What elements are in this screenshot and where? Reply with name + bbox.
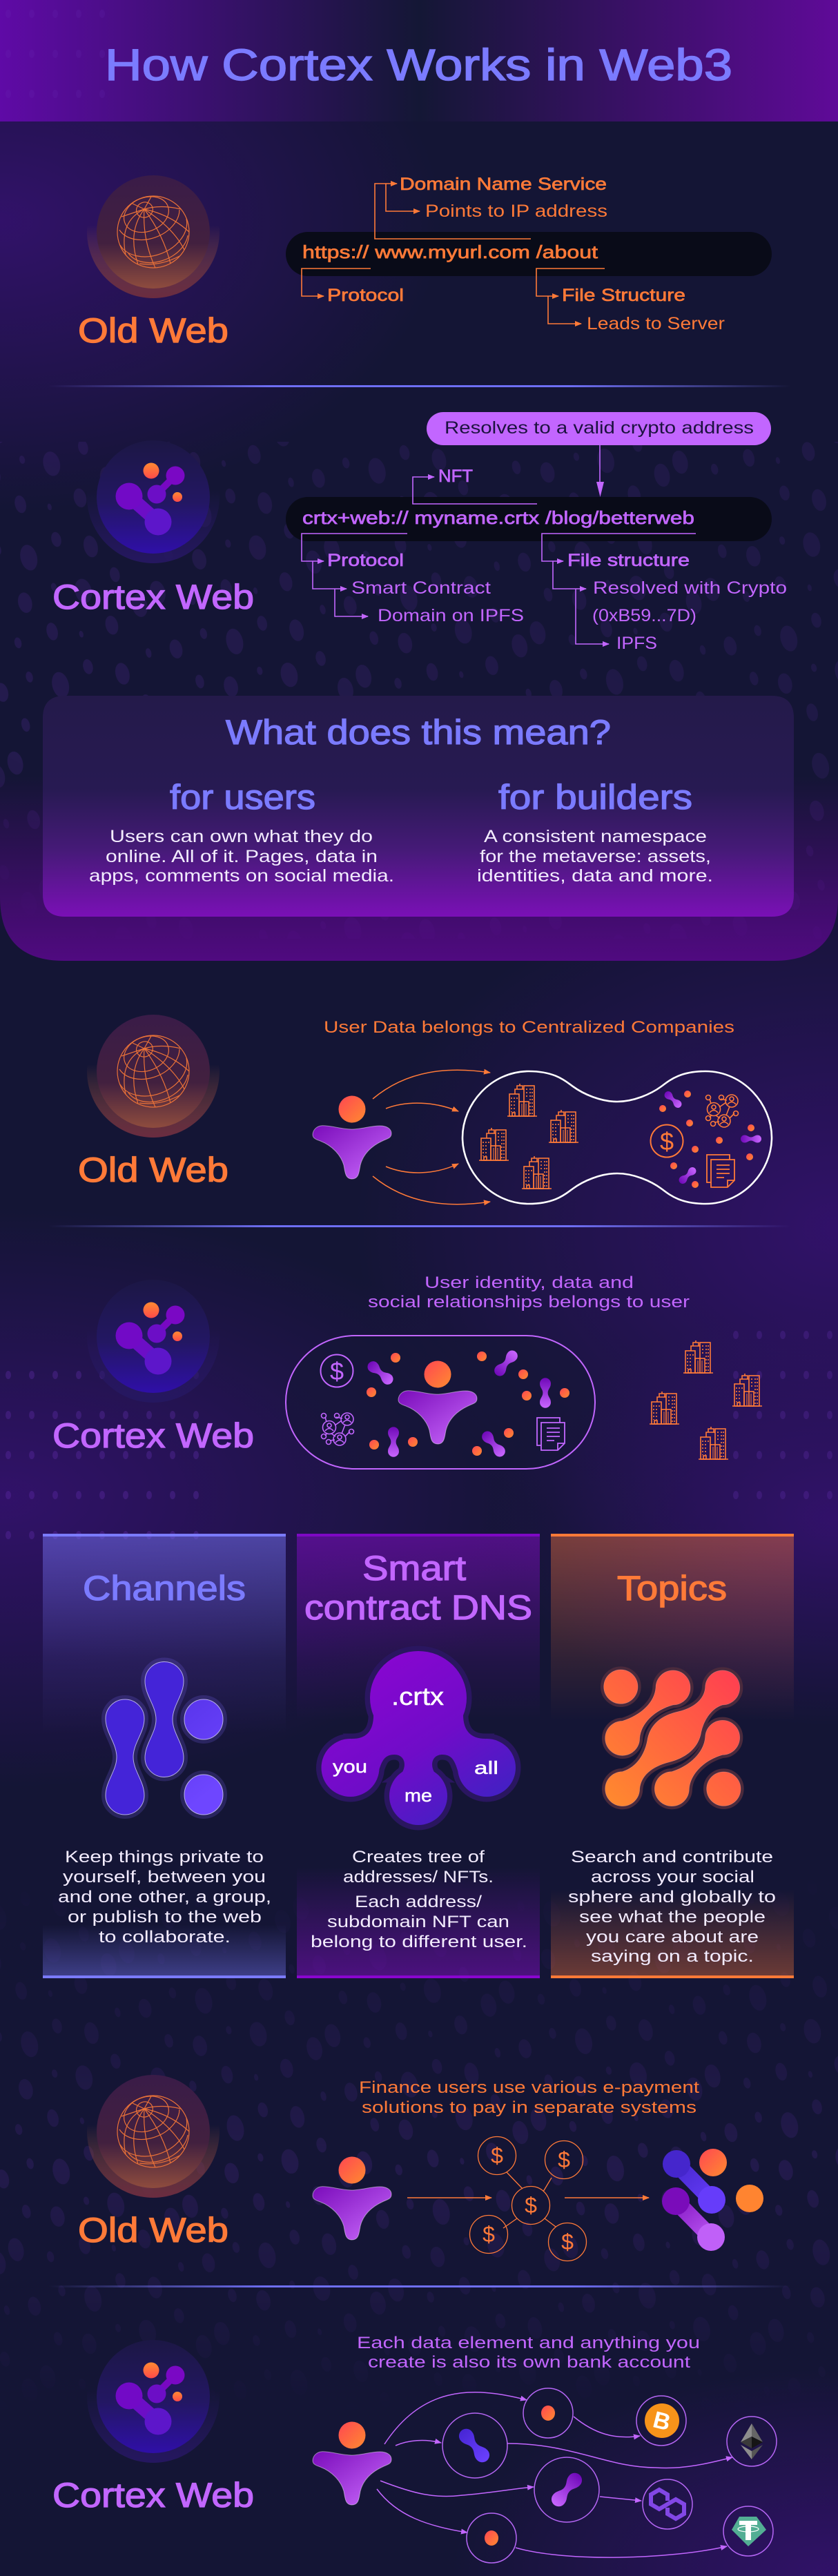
label: Resolved with Crypto: Resolved with Crypto xyxy=(593,578,787,598)
URL text: crtx+web:// myname.crtx /blog/betterweb xyxy=(302,507,694,528)
heading xyxy=(304,1549,532,1627)
section: old web URL xyxy=(78,166,772,350)
text: users: Users can own what they do xyxy=(110,827,373,846)
text: builders: A consistent namespace xyxy=(484,827,707,846)
icon: network xyxy=(705,1095,739,1127)
caption xyxy=(357,2334,700,2372)
label: Domain on IPFS: Domain on IPFS xyxy=(378,606,524,625)
caption: User Data belongs to Centralized Companies xyxy=(324,1018,734,1037)
node circles xyxy=(442,2388,599,2563)
text: see what the people xyxy=(579,1908,766,1926)
heading: Channels xyxy=(83,1569,246,1608)
text: Creates tree of xyxy=(352,1848,485,1866)
text: to collaborate. xyxy=(99,1928,231,1946)
connectors xyxy=(302,477,696,644)
text: Each address/ xyxy=(355,1893,482,1911)
label: Protocol: Protocol xyxy=(327,286,404,305)
connectors xyxy=(302,184,605,324)
text: you care about are xyxy=(586,1928,759,1946)
icon: DNS tree xyxy=(322,1651,516,1825)
URL bar xyxy=(286,497,772,541)
icon: channels xyxy=(106,1662,223,1815)
panel: what does this mean xyxy=(0,676,838,961)
label: Cortex Web: Cortex Web xyxy=(52,578,254,616)
node contents xyxy=(456,2406,585,2546)
text xyxy=(58,1848,271,1946)
text: Search and contribute xyxy=(571,1848,773,1866)
heading: contract DNS xyxy=(304,1588,532,1627)
payment network: $ xyxy=(561,2229,574,2254)
icon: dollar xyxy=(650,1125,683,1157)
payment network xyxy=(469,2137,587,2261)
text: builders: identities, data and more. xyxy=(477,866,713,886)
label: Protocol: Protocol xyxy=(327,551,404,570)
text: subdomain NFT can xyxy=(327,1913,509,1931)
icon: user xyxy=(313,2156,391,2240)
text xyxy=(568,1848,776,1966)
label: Cortex Web: Cortex Web xyxy=(52,2476,254,2515)
payment network: $ xyxy=(483,2222,495,2247)
text: users: online. All of it. Pages, data in xyxy=(106,847,378,866)
icon: dollar xyxy=(320,1354,353,1387)
icon: DNS tree: .crtx xyxy=(391,1682,444,1710)
text xyxy=(311,1848,527,1951)
icon: DNS tree: you xyxy=(333,1756,367,1777)
payment network: $ xyxy=(558,2147,570,2172)
label: Smart Contract: Smart Contract xyxy=(351,578,491,598)
icon: DNS tree: all xyxy=(474,1757,498,1778)
label: Leads to Server: Leads to Server xyxy=(587,314,725,333)
label: Old Web: Old Web xyxy=(78,2211,228,2250)
text: builders: for the metaverse: assets, xyxy=(480,847,711,866)
heading: Topics xyxy=(617,1569,727,1608)
icon: bitcoin xyxy=(636,2396,686,2446)
icon: user xyxy=(313,2421,391,2505)
icon: bitcoin: B xyxy=(650,2407,673,2436)
section: old web finance xyxy=(78,2065,763,2261)
label: Points to IP address: Points to IP address xyxy=(425,202,607,221)
section: cortex web data ownership xyxy=(52,1270,762,1469)
icon: DNS tree: me xyxy=(405,1785,432,1806)
caption xyxy=(368,1274,690,1311)
data blobs and dots xyxy=(659,1090,761,1188)
icon: cortex logo xyxy=(87,431,220,563)
icon: network xyxy=(322,1413,353,1445)
caption xyxy=(359,2078,699,2117)
icon: old web globe xyxy=(87,2065,220,2198)
pill: resolves: Resolves to a valid crypto address xyxy=(445,418,754,438)
container: centralized companies xyxy=(462,1071,772,1204)
arrow: pill to bar xyxy=(596,445,604,497)
icon: user xyxy=(313,1096,391,1179)
label: Domain Name Service: Domain Name Service xyxy=(400,175,607,194)
text: addresses/ NFTs. xyxy=(343,1868,494,1886)
text: belong to different user. xyxy=(311,1933,527,1951)
text: users: apps, comments on social media. xyxy=(89,866,394,886)
label: NFT: NFT xyxy=(438,467,473,486)
arrows xyxy=(407,2197,649,2198)
heading: for users: for users xyxy=(170,778,315,817)
icon: document xyxy=(537,1418,565,1450)
text: users xyxy=(89,827,394,886)
pill: resolves xyxy=(427,412,771,445)
payment network: $ xyxy=(491,2143,503,2168)
heading: What does this mean? xyxy=(226,713,611,752)
caption: social relationships belongs to user xyxy=(368,1293,690,1311)
URL bar xyxy=(286,232,772,276)
icon: document xyxy=(707,1155,734,1187)
label: File structure: File structure xyxy=(567,551,690,570)
icon: polygon xyxy=(643,2479,692,2529)
header banner xyxy=(0,0,838,121)
caption: create is also its own bank account xyxy=(368,2353,690,2372)
flow arrows xyxy=(377,2392,732,2557)
text: sphere and globally to xyxy=(568,1888,776,1906)
text: builders xyxy=(477,827,713,886)
heading: for builders: for builders xyxy=(498,778,692,817)
icons: buildings xyxy=(479,1084,578,1189)
title: How Cortex Works in Web3 xyxy=(105,40,732,90)
label: Old Web: Old Web xyxy=(78,1151,228,1189)
arrows to companies xyxy=(373,1070,490,1204)
caption: Finance users use various e-payment xyxy=(359,2078,699,2097)
panel: topics xyxy=(551,1534,794,1978)
text: yourself, between you xyxy=(63,1868,266,1886)
section: cortex web finance xyxy=(52,2330,777,2563)
icon: tether xyxy=(723,2506,773,2556)
label: Old Web: Old Web xyxy=(78,311,228,350)
container: user owned xyxy=(286,1336,595,1469)
caption: solutions to pay in separate systems xyxy=(362,2098,696,2117)
section: old web data ownership xyxy=(78,1005,772,1204)
text: and one other, a group, xyxy=(58,1888,271,1906)
icon: cortex logo xyxy=(87,2330,220,2463)
caption: Each data element and anything you xyxy=(357,2334,700,2352)
icon: old web globe xyxy=(87,166,220,298)
text: Keep things private to xyxy=(65,1848,264,1866)
icon: topics xyxy=(604,1670,741,1806)
icon: cortex logo xyxy=(87,1270,220,1403)
label: Cortex Web: Cortex Web xyxy=(52,1416,254,1455)
icon: ethereum xyxy=(727,2417,777,2466)
panel: channels xyxy=(43,1534,286,1978)
icon: dollar: $ xyxy=(330,1357,344,1385)
icon: user xyxy=(398,1361,477,1444)
label: File Structure: File Structure xyxy=(562,286,685,305)
text: or publish to the web xyxy=(68,1908,262,1926)
text: saying on a topic. xyxy=(591,1947,754,1966)
heading: Smart xyxy=(362,1549,466,1588)
icons: buildings outside xyxy=(650,1340,762,1459)
icon: payment system logo xyxy=(662,2149,763,2251)
section: cortex web URL xyxy=(52,412,787,653)
text: across your social xyxy=(591,1868,754,1886)
data blobs and dots xyxy=(365,1348,569,1459)
URL text: https:// www.myurl.com /about xyxy=(302,242,598,262)
panel: smart contract DNS xyxy=(297,1534,540,1978)
label: IPFS: IPFS xyxy=(616,634,657,653)
caption: User identity, data and xyxy=(425,1274,634,1292)
icon: dollar: $ xyxy=(660,1127,674,1155)
icon: old web globe xyxy=(87,1005,220,1138)
label: crypto address: (0xB59...7D) xyxy=(592,606,696,625)
payment network: $ xyxy=(525,2193,537,2218)
